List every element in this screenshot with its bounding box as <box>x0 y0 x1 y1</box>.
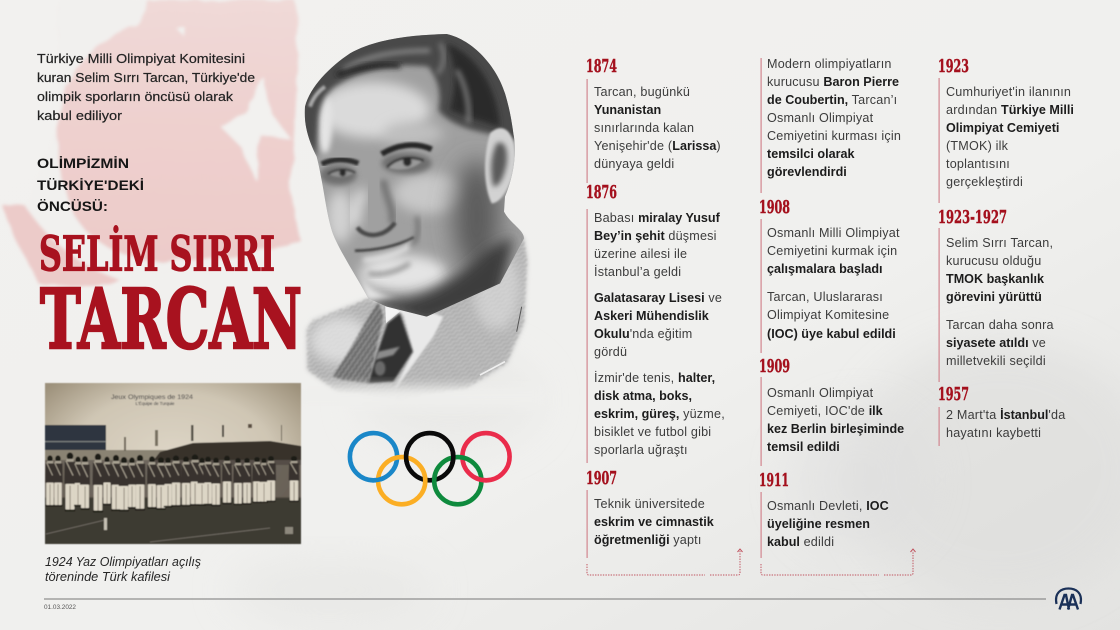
footer rule <box>44 598 1046 600</box>
1908: Tarcan, Uluslararası <box>767 290 883 304</box>
intro text <box>37 51 255 123</box>
1911: Osmanlı Devleti, IOC <box>767 499 889 513</box>
photo caption <box>45 554 201 584</box>
1923-1927: kurucusu olduğu <box>946 254 1041 268</box>
1923: ardından Türkiye Milli <box>946 103 1074 117</box>
1876: İzmir'de tenis, halter, <box>594 371 715 385</box>
1876: Galatasaray Lisesi ve <box>594 291 722 305</box>
portrait <box>293 30 547 407</box>
timeline column 1 <box>586 56 742 575</box>
main title: SELİM SIRRI <box>39 224 275 282</box>
1923-1927: 1923-1927 <box>938 207 1007 228</box>
1923: toplantısını <box>946 157 1010 171</box>
1874: Yenişehir'de (Larissa) <box>594 139 721 153</box>
Coubertin: de Coubertin, Tarcan’ı <box>767 93 897 107</box>
head <box>300 30 533 323</box>
1923: gerçekleştirdi <box>946 175 1023 189</box>
1909 <box>759 356 904 466</box>
1923-1927: Tarcan daha sonra <box>946 318 1054 332</box>
photo text <box>111 394 193 406</box>
1911: kabul edildi <box>767 535 834 549</box>
intro text: kuran Selim Sırrı Tarcan, Türkiye'de <box>37 70 255 85</box>
1876 <box>586 182 725 463</box>
1908: Olimpiyat Komitesine <box>767 308 889 322</box>
1908 <box>759 197 900 353</box>
arrow: continues to next column <box>761 549 916 575</box>
1874: 1874 <box>586 56 617 77</box>
1909: 1909 <box>759 356 790 377</box>
1876: üzerine ailesi ile <box>594 247 687 261</box>
1908: Osmanlı Milli Olimpiyat <box>767 226 900 240</box>
1876: sporlarla uğraştı <box>594 443 688 457</box>
shirt and tie <box>368 300 443 392</box>
subtitle <box>37 155 144 215</box>
1908: 1908 <box>759 197 790 218</box>
1876: Bey’in şehit düşmesi <box>594 229 717 243</box>
Coubertin: kurucusu Baron Pierre <box>767 75 899 89</box>
1876: disk atma, boks, <box>594 389 692 403</box>
nose <box>355 190 363 225</box>
1911: 1911 <box>759 470 789 491</box>
ear <box>485 128 515 203</box>
Coubertin: Modern olimpiyatların <box>767 57 892 71</box>
1923-1927 <box>938 207 1054 382</box>
1909: kez Berlin birleşiminde <box>767 422 904 436</box>
jacket <box>307 223 527 398</box>
intro text: olimpik sporların öncüsü olarak <box>37 89 234 104</box>
photo: 1924 Turkish delegation <box>45 383 301 544</box>
stadium <box>45 424 301 465</box>
Coubertin: Cemiyetini kurması için <box>767 129 901 143</box>
icon: AA logo <box>1056 588 1081 610</box>
1957 <box>938 384 1065 446</box>
1874: sınırlarında kalan <box>594 121 694 135</box>
1909: Osmanlı Olimpiyat <box>767 386 874 400</box>
date: 01.03.2022 <box>44 604 76 611</box>
subtitle: TÜRKİYE'DEKİ <box>37 177 144 194</box>
1907: öğretmenliği yaptı <box>594 533 702 547</box>
hair <box>304 34 514 158</box>
1957: hayatını kaybetti <box>946 426 1041 440</box>
1874 <box>586 56 721 183</box>
main title: TARCAN <box>40 272 302 368</box>
1876: İstanbul’a geldi <box>594 265 681 279</box>
timeline column 3 <box>938 56 1074 446</box>
1876: Askeri Mühendislik <box>594 309 710 323</box>
1923-1927: görevini yürüttü <box>946 290 1042 304</box>
1923: (TMOK) ilk <box>946 139 1009 153</box>
1876: gördü <box>594 345 627 359</box>
1876: bisiklet ve futbol gibi <box>594 425 711 439</box>
1907 <box>586 468 715 558</box>
1923: Cumhuriyet'in ilanının <box>946 85 1071 99</box>
1908: (IOC) üye kabul edildi <box>767 327 896 341</box>
1907: 1907 <box>586 468 617 489</box>
1909: temsil edildi <box>767 440 840 454</box>
intro text: Türkiye Milli Olimpiyat Komitesini <box>37 51 245 66</box>
mouth <box>355 237 414 251</box>
1923: 1923 <box>938 56 969 77</box>
1923-1927: TMOK başkanlık <box>946 272 1045 286</box>
1957: 1957 <box>938 384 969 405</box>
1908: çalışmalara başladı <box>767 262 883 276</box>
1907: eskrim ve cimnastik <box>594 515 715 529</box>
brows <box>322 160 358 164</box>
eye sockets <box>320 165 357 185</box>
1923 <box>938 56 1074 203</box>
flag watermark <box>2 0 302 288</box>
photo caption: töreninde Türk kafilesi <box>45 569 171 584</box>
photo text: Jeux Olympiques de 1924 <box>111 394 193 401</box>
1923: Olimpiyat Cemiyeti <box>946 121 1059 135</box>
1876: 1876 <box>586 182 617 203</box>
1876: Okulu'nda eğitim <box>594 327 692 341</box>
1876: eskrim, güreş, yüzme, <box>594 407 725 421</box>
subtitle: ÖNCÜSÜ: <box>37 198 108 215</box>
olympic rings <box>350 433 510 504</box>
main title <box>39 224 302 368</box>
Coubertin <box>760 57 901 193</box>
intro text: kabul ediliyor <box>37 108 123 123</box>
Coubertin: görevlendirdi <box>767 165 847 179</box>
1911 <box>759 470 889 558</box>
timeline column 2 <box>759 57 916 575</box>
photo text: L'Équipe de Turquie <box>136 401 175 406</box>
1923-1927: milletvekili seçildi <box>946 354 1046 368</box>
photo caption: 1924 Yaz Olimpiyatları açılış <box>45 554 201 569</box>
eyes <box>328 158 423 177</box>
1908: Cemiyetini kurmak için <box>767 244 897 258</box>
arrow: continues to next column <box>587 549 742 575</box>
Coubertin: Osmanlı Olimpiyat <box>767 111 874 125</box>
1911: üyeliğine resmen <box>767 517 870 531</box>
1909: Cemiyeti, IOC'de ilk <box>767 404 884 418</box>
1874: dünyaya geldi <box>594 157 674 171</box>
fade out <box>293 387 547 407</box>
1923-1927: Selim Sırrı Tarcan, <box>946 236 1053 250</box>
1923-1927: siyasete atıldı ve <box>946 336 1046 350</box>
1957: 2 Mart'ta İstanbul'da <box>946 407 1065 422</box>
athletes <box>45 453 299 512</box>
1907: Teknik üniversitede <box>594 497 705 511</box>
1876: Babası miralay Yusuf <box>594 211 721 225</box>
1874: Tarcan, bugünkü <box>594 85 690 99</box>
subtitle: OLİMPİZMİN <box>37 155 129 172</box>
1874: Yunanistan <box>594 103 661 117</box>
Coubertin: temsilci olarak <box>767 147 856 161</box>
